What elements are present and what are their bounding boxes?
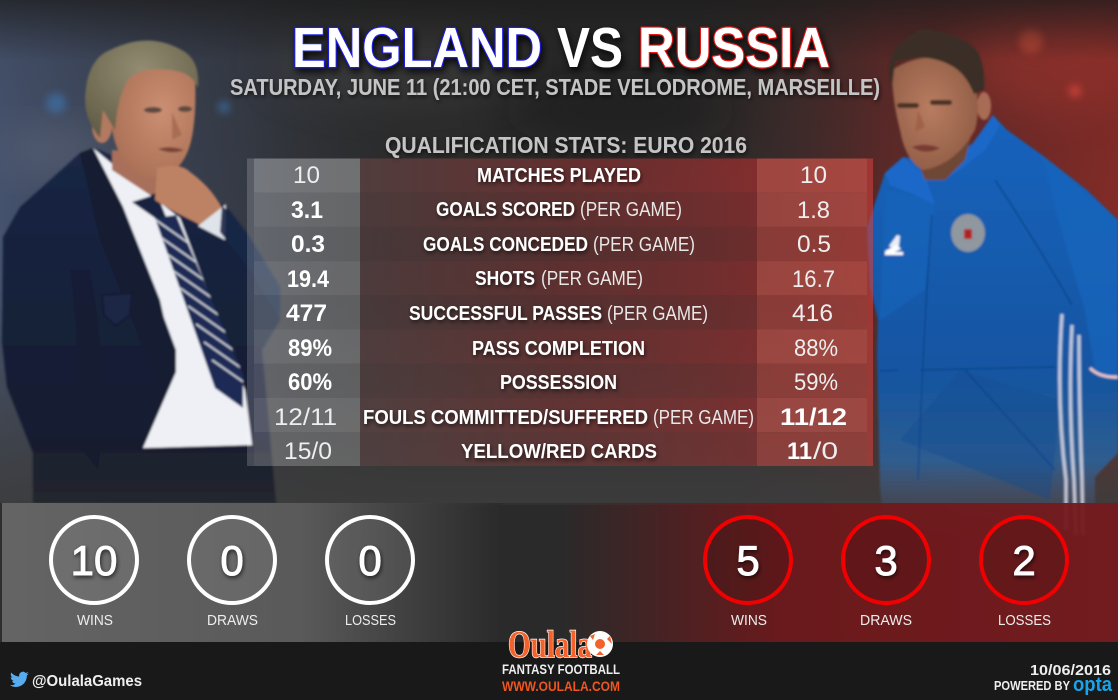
row: fouls: FOULS COMMITTED/SUFFERED [363,407,648,429]
draws circle: 3 [874,537,898,584]
draws circle [189,517,275,629]
row: shots: 16.7 [792,266,835,293]
hair [85,40,198,138]
row: goals scored: (PER GAME) [580,199,682,221]
row: matches played: MATCHES PLAYED [477,165,641,187]
logo wordmark: Oulala [508,624,592,666]
wins circle: WINS [731,612,767,629]
wins circle: 5 [736,537,760,584]
row: fouls: (PER GAME) [653,407,754,429]
draws circle: 0 [220,537,244,584]
eyes and mouth [144,106,192,152]
row: goals scored: 3.1 [291,197,323,224]
stats table [247,158,873,466]
row: cards: YELLOW/RED CARDS [461,441,657,463]
zipper and pocket seams [880,180,1072,480]
row: possession: 59% [794,369,838,396]
row: goals conceded: GOALS CONCEDED [423,234,588,256]
website: WWW.OULALA.COM [502,678,620,694]
title [292,16,830,80]
logo tagline: FANTASY FOOTBALL [502,661,620,677]
suit jacket [2,148,280,503]
section heading: QUALIFICATION STATS: EURO 2016 [385,132,747,158]
sleeve shading [1042,155,1118,380]
ear [977,92,991,120]
draws circle [843,517,929,629]
eyes and mouth [897,100,952,152]
row: goals scored [291,197,830,224]
jacket body [867,115,1118,537]
row: shots: SHOTS [475,268,535,290]
logo football [587,631,613,657]
row: successful passes: 416 [792,300,833,327]
row: cards: 15/0 [284,438,332,465]
row: fouls [274,404,847,431]
icon: twitter bird [10,672,29,687]
row: possession: 60% [288,369,332,396]
adidas logo [885,235,903,255]
title: RUSSIA [638,16,830,80]
row: successful passes: 477 [286,300,327,327]
losses circle: 0 [358,537,382,584]
row: cards: /0 [813,438,838,465]
row: matches played: 10 [293,162,320,189]
panel: England record [0,503,502,642]
crest [951,214,985,252]
lapel [80,148,176,390]
row: matches played [293,162,827,189]
sleeve [220,205,280,320]
neck [112,150,180,195]
row: successful passes [286,300,833,327]
row: pass completion [288,335,838,362]
twitter handle: @OulalaGames [32,673,142,690]
row: possession: POSSESSION [500,372,617,394]
neck [915,120,975,180]
panel: Russia record [502,503,1118,642]
shirt [93,148,252,448]
subtitle: SATURDAY, JUNE 11 (21:00 CET, STADE VELODROME, MARSEILLE) [230,74,880,100]
title: ENGLAND [292,16,542,80]
date and opta credit: opta [1073,674,1113,696]
row: fouls: 12/11 [274,404,337,431]
date and opta credit: 10/06/2016 [1030,662,1111,679]
ear [92,109,112,143]
cuff [1090,368,1118,377]
row: goals conceded: 0.3 [291,231,325,258]
date and opta credit [994,662,1113,696]
wins circle: WINS [77,612,113,629]
row: cards [284,438,838,465]
row: goals scored: 1.8 [797,197,830,224]
hand [155,166,225,236]
sleeve crease [70,270,102,470]
wins circle [51,517,137,629]
table row backgrounds [247,158,873,466]
losses circle [327,517,413,629]
losses circle [981,517,1067,629]
losses circle: LOSSES [345,612,396,629]
row: cards: 11 [787,438,812,465]
date and opta credit: POWERED BY [994,678,1070,693]
row: successful passes: (PER GAME) [607,303,708,325]
row: shots [287,266,835,293]
cuff [198,204,226,240]
row: fouls: 11/12 [780,404,847,431]
row: matches played: 10 [800,162,827,189]
crest on jacket [102,293,132,326]
face [112,66,195,178]
hair [889,29,984,94]
wins circle: 10 [71,537,117,584]
tie [132,194,252,408]
row: pass completion: 89% [288,335,332,362]
photo: England manager [2,40,280,503]
row: goals conceded: (PER GAME) [593,234,695,256]
Oulala logo [502,624,620,694]
row: possession [288,369,838,396]
row: goals conceded: 0.5 [797,231,831,258]
row: successful passes: SUCCESSFUL PASSES [409,303,602,325]
footer strip [0,642,1118,700]
losses circle: LOSSES [998,612,1051,629]
sleeve stripes [1060,314,1083,535]
draws circle: DRAWS [860,612,912,629]
face [892,58,978,170]
row: pass completion: 88% [794,335,838,362]
hood collar [945,115,1000,178]
row: shots: 19.4 [287,266,330,293]
draws circle: DRAWS [207,612,258,629]
row: pass completion: PASS COMPLETION [472,338,645,360]
title: VS [557,16,623,80]
row: goals scored: GOALS SCORED [436,199,575,221]
row: shots: (PER GAME) [541,268,643,290]
row: goals conceded [291,231,831,258]
trousers [125,440,275,503]
photo: Russia manager [867,29,1118,537]
losses circle: 2 [1012,537,1036,584]
wins circle [705,517,791,629]
